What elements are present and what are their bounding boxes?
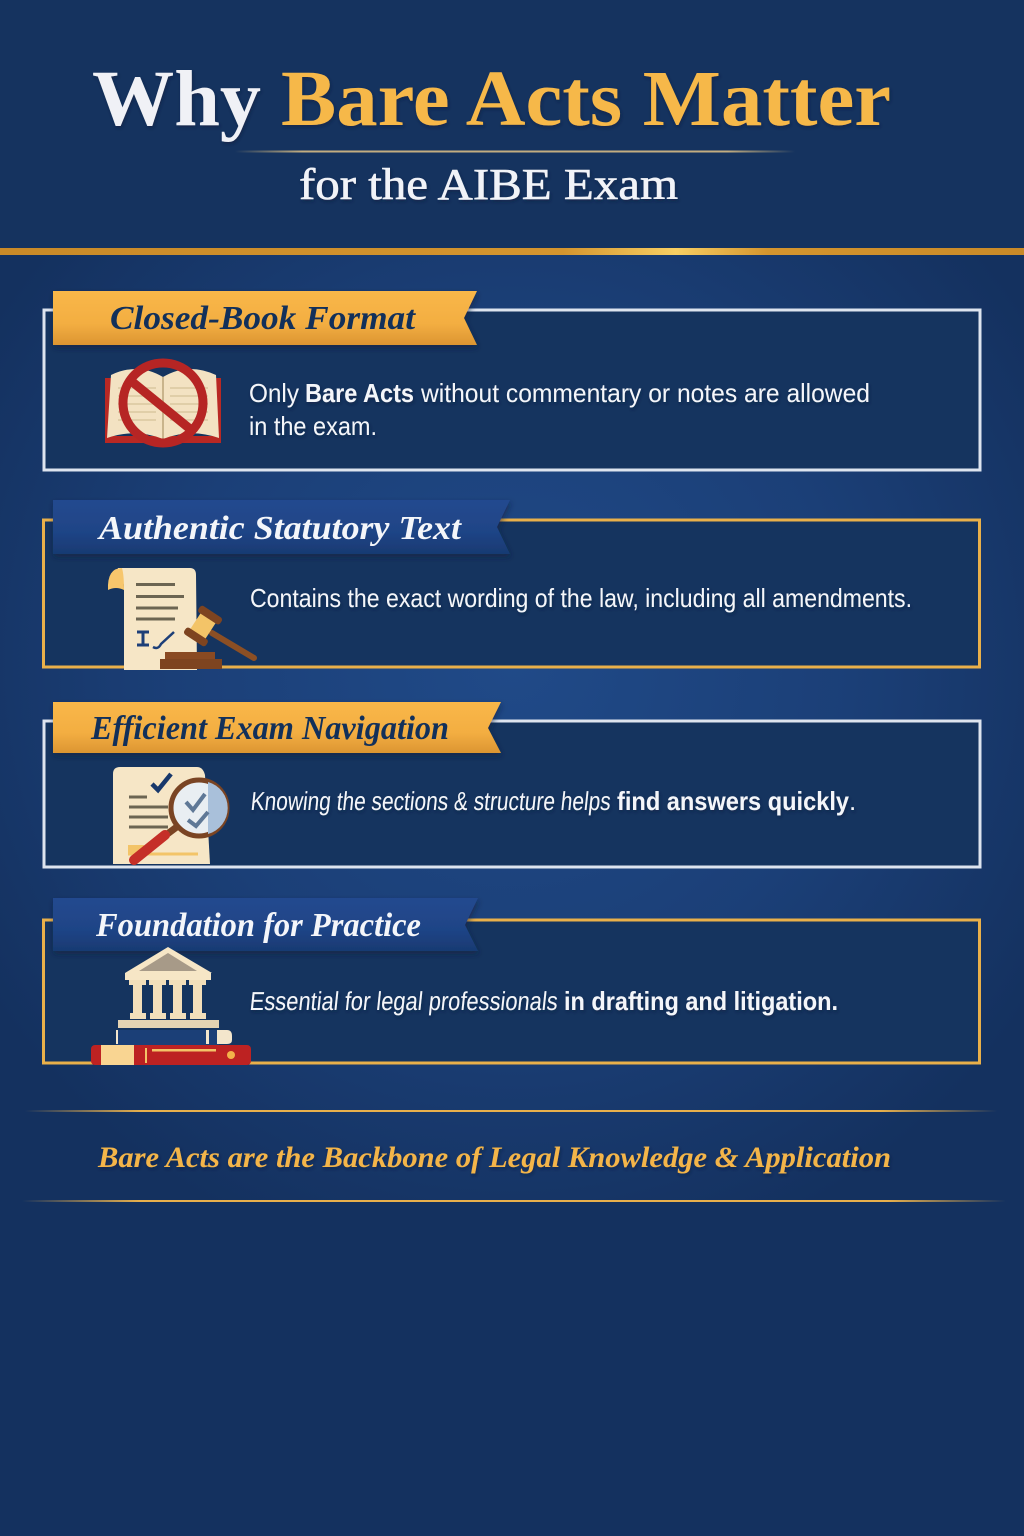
text: closed-book body bbox=[249, 378, 870, 441]
ribbon: closed-book format: Closed-Book Format bbox=[110, 300, 417, 337]
icon: courthouse on books bbox=[91, 947, 251, 1065]
subtitle: for the AIBE Exam bbox=[299, 160, 678, 209]
ribbon: efficient exam navigation: Efficient Exam Navigation bbox=[90, 710, 449, 747]
title: Why bbox=[92, 56, 261, 143]
text: closed-book body: without commentary or notes are allowed bbox=[420, 378, 870, 408]
title: Bare Acts Matter bbox=[281, 56, 891, 143]
panel: authentic statutory text bbox=[44, 500, 980, 670]
ribbon: foundation for practice bbox=[53, 898, 478, 951]
text: navigation body: Knowing the sections & structure helps bbox=[249, 786, 613, 816]
icon: checklist and magnifier bbox=[113, 767, 228, 864]
ribbon: authentic statutory text: Authentic Statutory Text bbox=[97, 510, 463, 547]
text: foundation body bbox=[248, 986, 838, 1016]
ribbon: foundation for practice: Foundation for Practice bbox=[95, 907, 421, 944]
text: foundation body: in drafting and litigation. bbox=[564, 986, 838, 1016]
text: closed-book body: in the exam. bbox=[249, 411, 377, 441]
panel: closed-book format bbox=[44, 291, 980, 470]
text: foundation body: Essential for legal professionals bbox=[248, 986, 560, 1016]
ribbon: closed-book format bbox=[53, 291, 477, 345]
text: closed-book body: Bare Acts bbox=[305, 378, 414, 408]
ribbon: authentic statutory text bbox=[53, 500, 510, 554]
header gold rule bbox=[0, 248, 1024, 255]
icon: prohibited book bbox=[105, 363, 221, 443]
footer bottom rule bbox=[22, 1200, 1006, 1202]
text: closed-book body: Only bbox=[249, 378, 299, 408]
footer top rule bbox=[25, 1110, 997, 1112]
text: navigation body: . bbox=[849, 786, 856, 816]
panel: foundation for practice bbox=[44, 898, 980, 1065]
text: navigation body: find answers quickly bbox=[617, 786, 849, 816]
icon: scroll and gavel bbox=[108, 568, 254, 670]
text: authentic body: Contains the exact wording of the law, including all amendments. bbox=[250, 583, 912, 613]
closing statement: Bare Acts are the Backbone of Legal Knowledge & Application bbox=[97, 1141, 891, 1174]
panel: efficient exam navigation bbox=[44, 702, 980, 867]
title underline bbox=[235, 150, 795, 152]
ribbon: efficient exam navigation bbox=[53, 702, 501, 753]
